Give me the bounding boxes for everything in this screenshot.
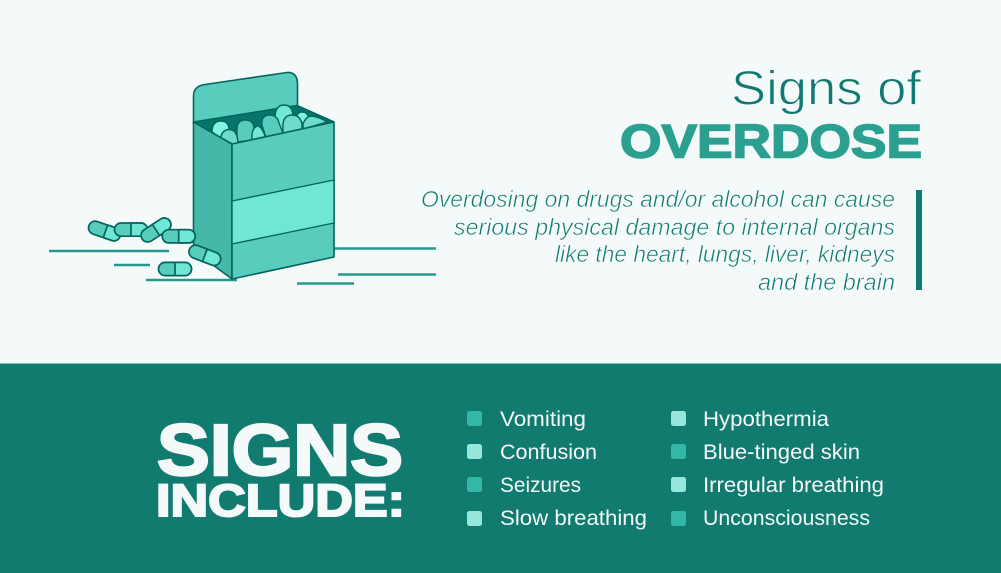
pills inside box — [212, 105, 327, 145]
description text: and the brain — [758, 269, 895, 295]
title: Signs of OVERDOSE — [620, 62, 922, 168]
spilled pills — [87, 215, 223, 276]
list: left column: Slow breathing — [500, 506, 647, 530]
list: right column: Unconsciousness — [703, 506, 870, 530]
list: left column: Seizures — [500, 473, 581, 497]
box back flap — [194, 72, 298, 124]
list: left column: Vomiting — [500, 407, 586, 431]
list: right column — [671, 407, 884, 530]
heading: SIGNS INCLUDE: INCLUDE: — [156, 475, 405, 526]
panel: bottom signs band — [0, 364, 1001, 573]
list: right column: Irregular breathing — [703, 473, 884, 497]
box left side — [194, 122, 232, 279]
list: right column: Hypothermia — [703, 407, 829, 431]
heading: SIGNS INCLUDE — [156, 411, 405, 526]
title: Signs of OVERDOSE: OVERDOSE — [620, 114, 922, 168]
box front band — [232, 180, 334, 244]
title: Signs of OVERDOSE: Signs of — [731, 62, 922, 116]
heading: SIGNS INCLUDE: SIGNS — [157, 411, 403, 491]
description text: like the heart, lungs, liver, kidneys — [555, 241, 895, 267]
box opening — [194, 106, 334, 145]
box front — [232, 122, 334, 279]
description text: serious physical damage to internal organs — [454, 214, 896, 240]
description text: Overdosing on drugs and/or alcohol can cause — [421, 186, 895, 212]
list: left column — [467, 407, 647, 530]
list: left column: Confusion — [500, 440, 597, 464]
list: right column: Blue-tinged skin — [703, 440, 860, 464]
illustration: pill box with spilled pills — [49, 72, 436, 283]
ground lines — [49, 248, 436, 284]
description text — [421, 186, 896, 295]
accent bar — [916, 190, 922, 290]
